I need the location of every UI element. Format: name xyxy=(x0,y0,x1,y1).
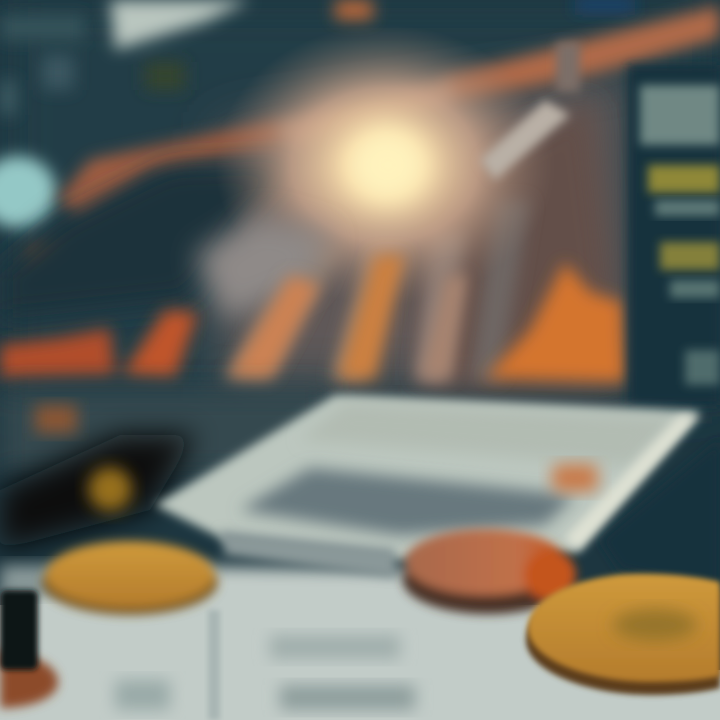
icon: copper coin centre xyxy=(403,529,576,614)
laptop front edge xyxy=(220,530,395,578)
panel: desk dark area xyxy=(0,390,720,590)
text block: light data row xyxy=(640,85,720,145)
laptop xyxy=(155,395,700,578)
orange key xyxy=(552,464,598,492)
keyboard xyxy=(240,468,575,535)
light rays xyxy=(225,200,530,380)
text block: yellow data row two xyxy=(660,242,720,270)
text block: pale data row two xyxy=(670,280,720,298)
icon: gold coin right xyxy=(526,574,720,695)
text block: yellow data row xyxy=(648,165,720,193)
icon: gold coin left xyxy=(42,541,218,615)
chart: dark lower-left mountain area xyxy=(0,160,300,320)
panel: top-left screen details xyxy=(0,0,635,273)
laptop side edge xyxy=(565,415,700,552)
text block: lower pale row xyxy=(685,350,720,385)
icon: white arrow ray xyxy=(480,42,580,180)
icon: central sun glow xyxy=(215,25,555,305)
icon: dark object bottom-left xyxy=(0,590,58,708)
chart: hazy centre mountains xyxy=(195,215,330,320)
chart: orange trend band xyxy=(58,5,720,218)
text block: pale data row xyxy=(655,200,720,216)
panel: papers on desk xyxy=(0,565,720,720)
bar chart: orange bars xyxy=(0,255,625,382)
panel: right side dark column xyxy=(628,65,720,405)
